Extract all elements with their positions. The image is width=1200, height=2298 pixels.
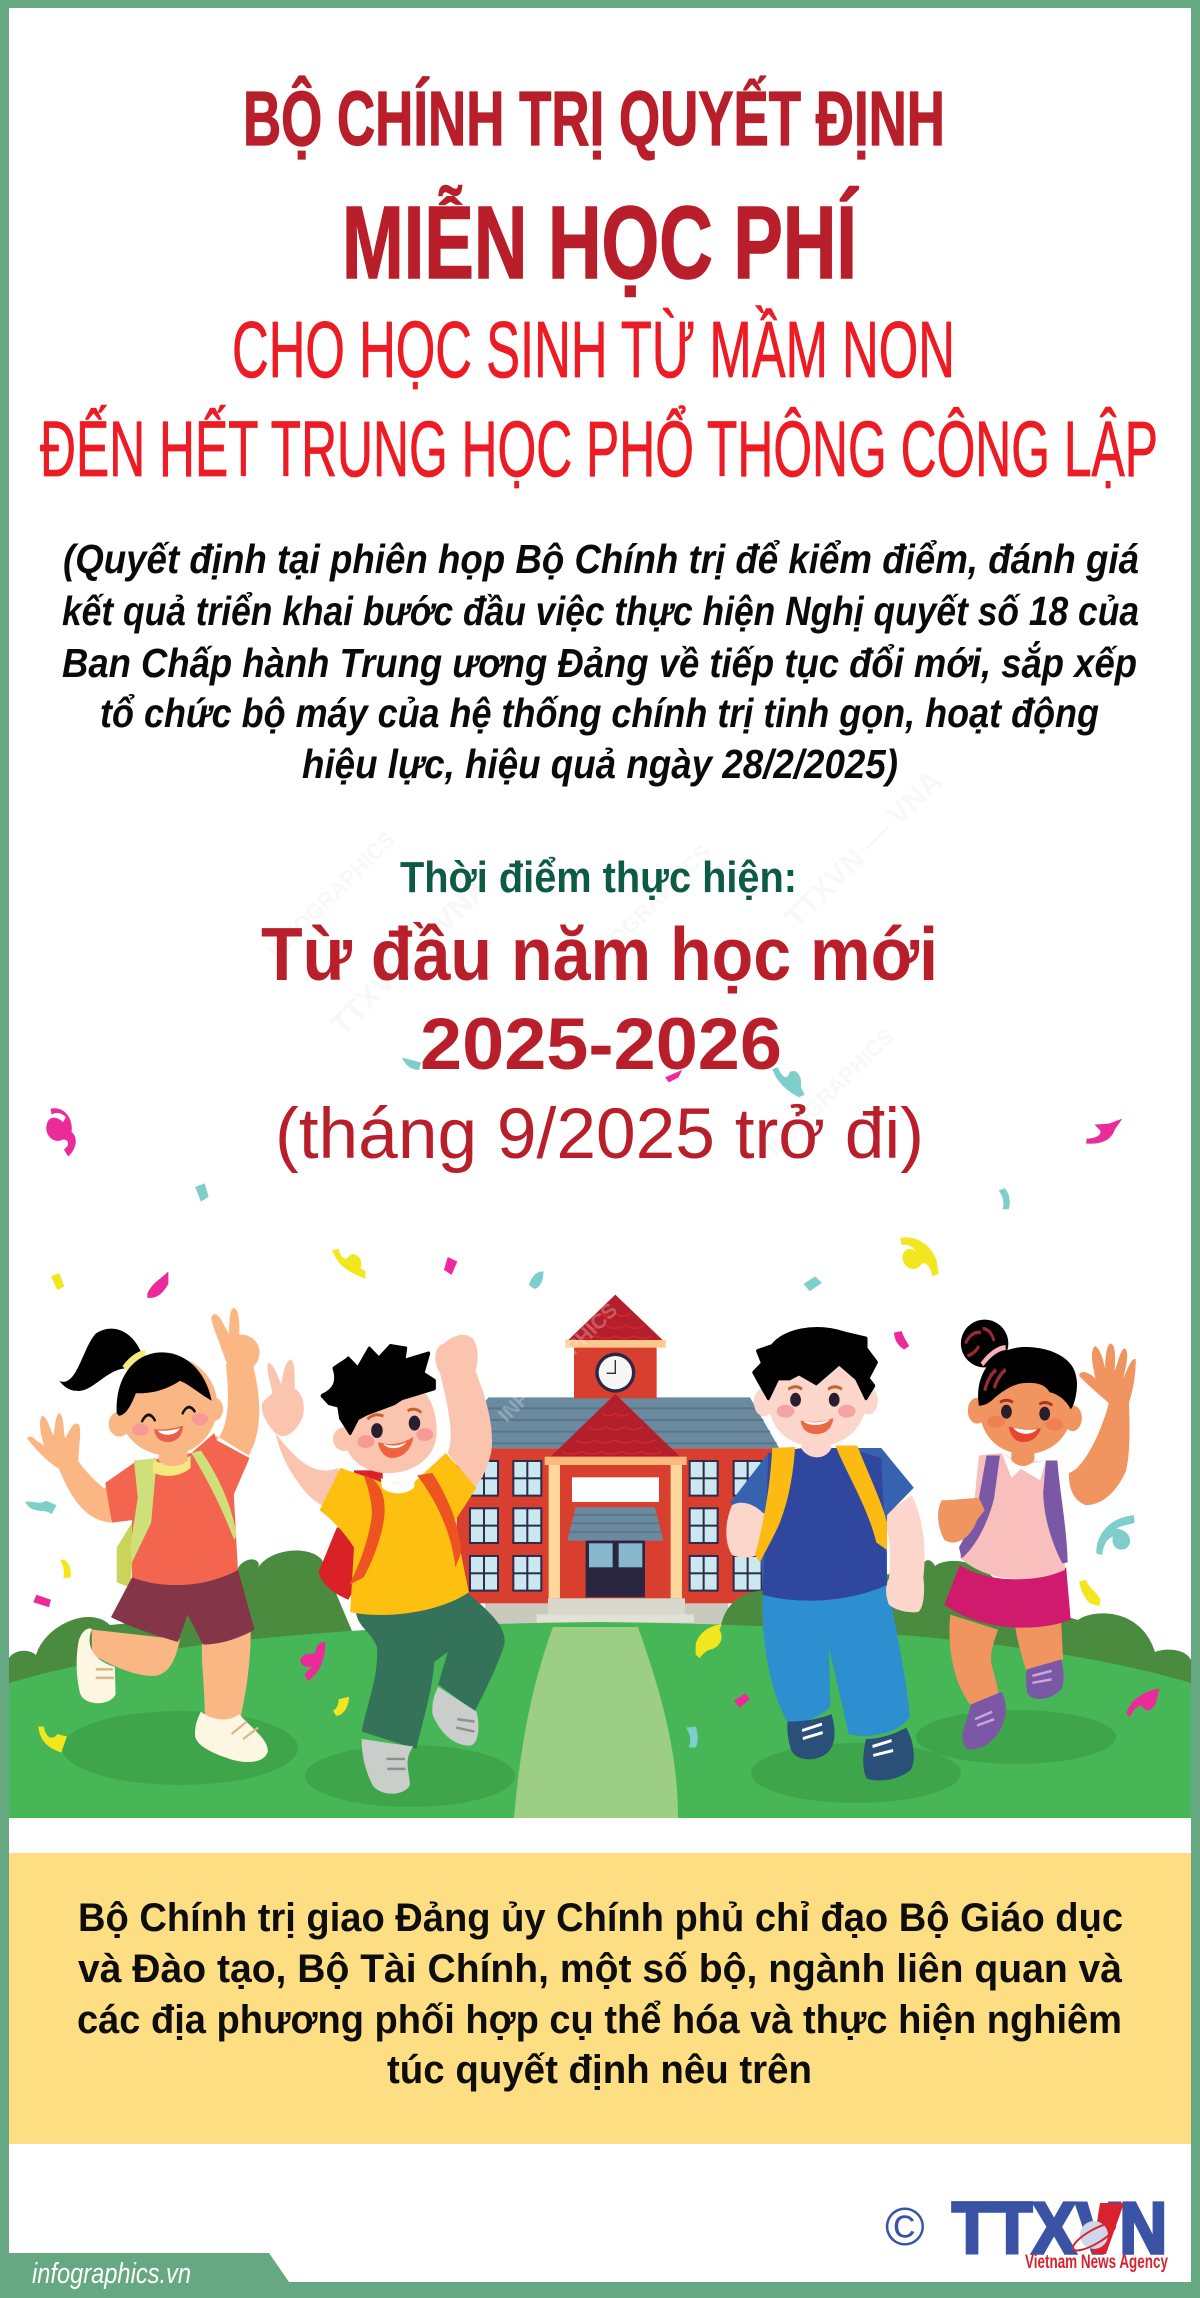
title [40,75,1158,493]
footpath [514,1627,678,1818]
lawn [9,1622,1191,1818]
instruction panel [9,1853,1191,2144]
timing block [261,853,938,1174]
right children [726,1320,1136,1780]
instruction text: các địa phương phối hợp cụ thể hóa và thực hiện nghiêm [77,1998,1122,2042]
timing headline: Từ đầu năm học mới [261,912,938,996]
watermarks: INFOGRAPHICS [579,840,716,977]
left children [27,1308,505,1794]
ground shadows [62,1710,1116,1807]
school building [450,1295,779,1625]
school year: 2025-2026 [420,1004,782,1085]
italic description: hiệu lực, hiệu quả ngày 28/2/2025) [302,741,898,787]
timing label: Thời điểm thực hiện: [400,853,797,902]
girl with ponytail [27,1308,268,1762]
watermarks [263,764,949,1161]
copyright mark: © [885,2197,925,2257]
italic description [62,536,1139,787]
school building: INFOGRAPHICS [494,1299,622,1427]
watermarks: INFOGRAPHICS [762,1024,899,1161]
confetti right [665,1067,1160,1747]
start month: (tháng 9/2025 trở đi) [275,1095,924,1174]
school illustration [9,1057,1191,1818]
girl with hair bun [938,1320,1136,1749]
instruction text [77,1896,1123,2092]
TTXVN logo: TTXVN [952,2189,1167,2269]
footer source tab [9,2253,289,2298]
bushes [9,1551,1191,1700]
watermarks: TTXVN — VNA [325,871,495,1042]
watermarks: INFOGRAPHICS [263,827,400,964]
confetti left [25,1057,543,1752]
instruction text: túc quyết định nêu trên [387,2048,812,2092]
instruction text: Bộ Chính trị giao Đảng ủy Chính phủ chỉ đạo Bộ Giáo dục [78,1896,1123,1940]
watermarks: TTXVN — VNA [779,764,949,935]
instruction text: và Đào tạo, Bộ Tài Chính, một số bộ, ngành liên quan và [78,1947,1123,1991]
footer source tab: infographics.vn [32,2258,191,2290]
title: MIỄN HỌC PHÍ [342,184,859,300]
boy in blue shirt [726,1329,925,1780]
boy in yellow shirt [262,1335,505,1794]
